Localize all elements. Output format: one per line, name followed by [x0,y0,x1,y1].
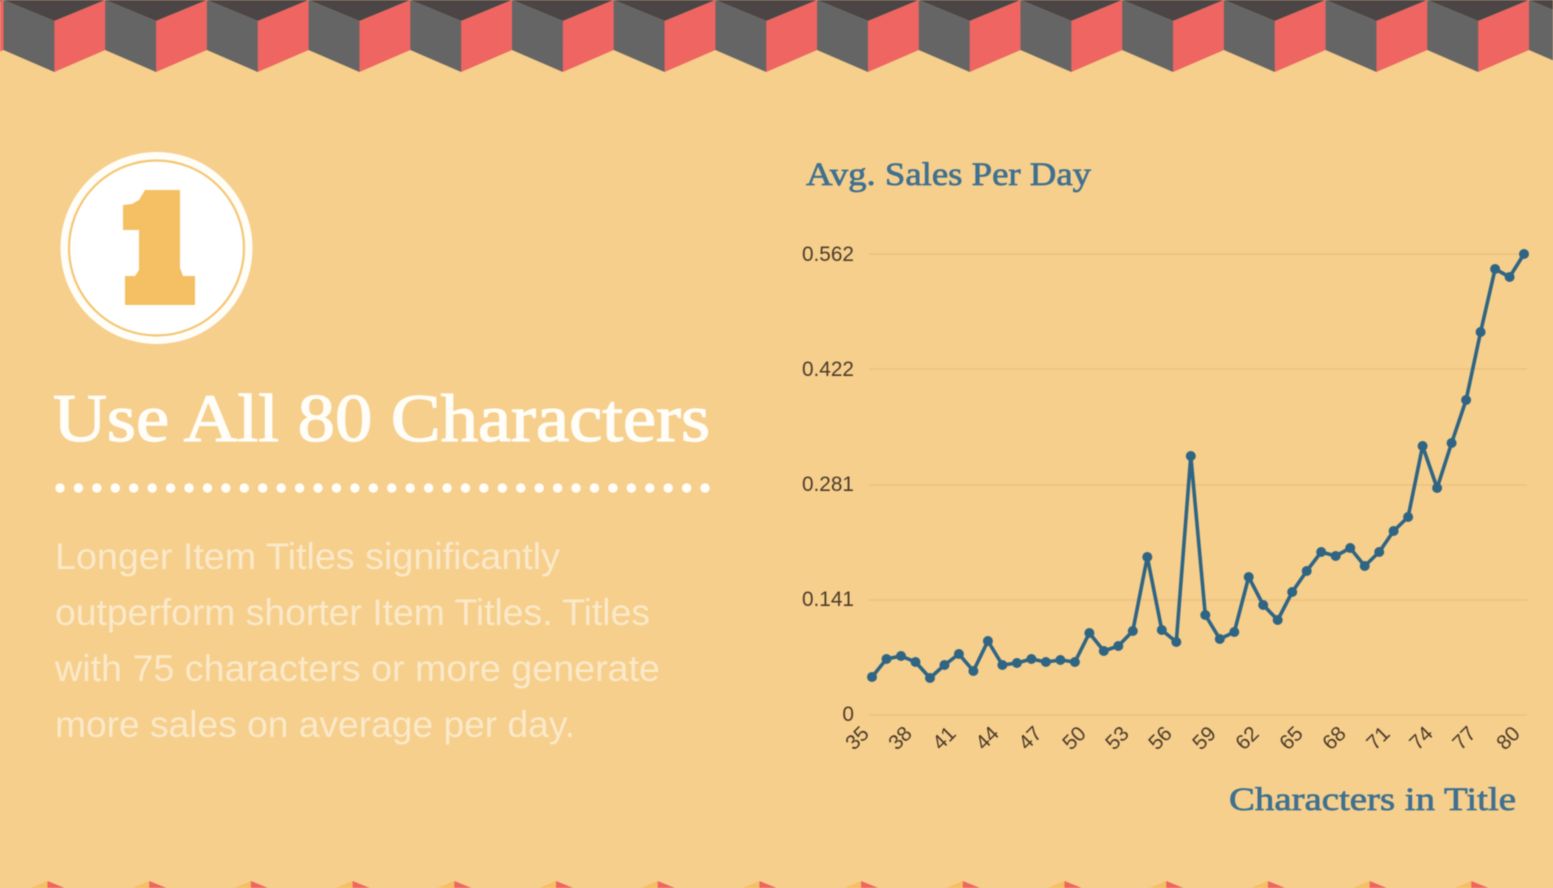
body text: more sales on average per day. [55,704,575,745]
gridlines [869,254,1527,715]
heading: Use All 80 Characters [53,380,710,456]
x axis labels: 65 [1275,722,1308,755]
x axis labels: 62 [1231,722,1264,755]
dotted divider [60,483,705,493]
x axis labels: 56 [1144,722,1177,755]
x axis title: Characters in Title [1229,782,1516,818]
x axis labels: 71 [1362,722,1395,755]
x axis labels: 80 [1492,722,1525,755]
y axis labels: 0.422 [802,358,854,381]
x axis labels: 41 [928,722,961,755]
body text: Longer Item Titles significantly [55,536,560,577]
body text [54,536,660,745]
x axis labels: 47 [1014,722,1047,755]
x axis labels: 74 [1405,722,1438,755]
data line [872,254,1524,678]
x axis labels: 77 [1448,722,1481,755]
x axis labels: 38 [884,722,917,755]
y axis labels: 0.562 [802,243,854,266]
chart: average sales per day by characters in title [802,157,1527,818]
data points [872,254,1524,678]
top cube border [0,0,1553,72]
y axis labels: 0.141 [802,588,854,611]
x axis labels: 59 [1188,722,1221,755]
x axis labels: 50 [1058,722,1091,755]
x axis labels: 35 [841,722,874,755]
bottom cube border [0,881,1553,888]
body text: outperform shorter Item Titles. Titles [55,592,650,633]
body text: with 75 characters or more generate [54,648,660,689]
y axis labels [802,243,854,726]
x axis labels [841,722,1525,755]
chart title: Avg. Sales Per Day [806,157,1092,193]
icon: number 1 badge [60,152,252,344]
icon: number 1 badge: 1 [119,158,201,341]
x axis labels: 53 [1101,722,1134,755]
y axis labels: 0 [842,703,854,726]
x axis labels: 68 [1318,722,1351,755]
y axis labels: 0.281 [802,473,854,496]
x axis labels: 44 [971,722,1004,755]
